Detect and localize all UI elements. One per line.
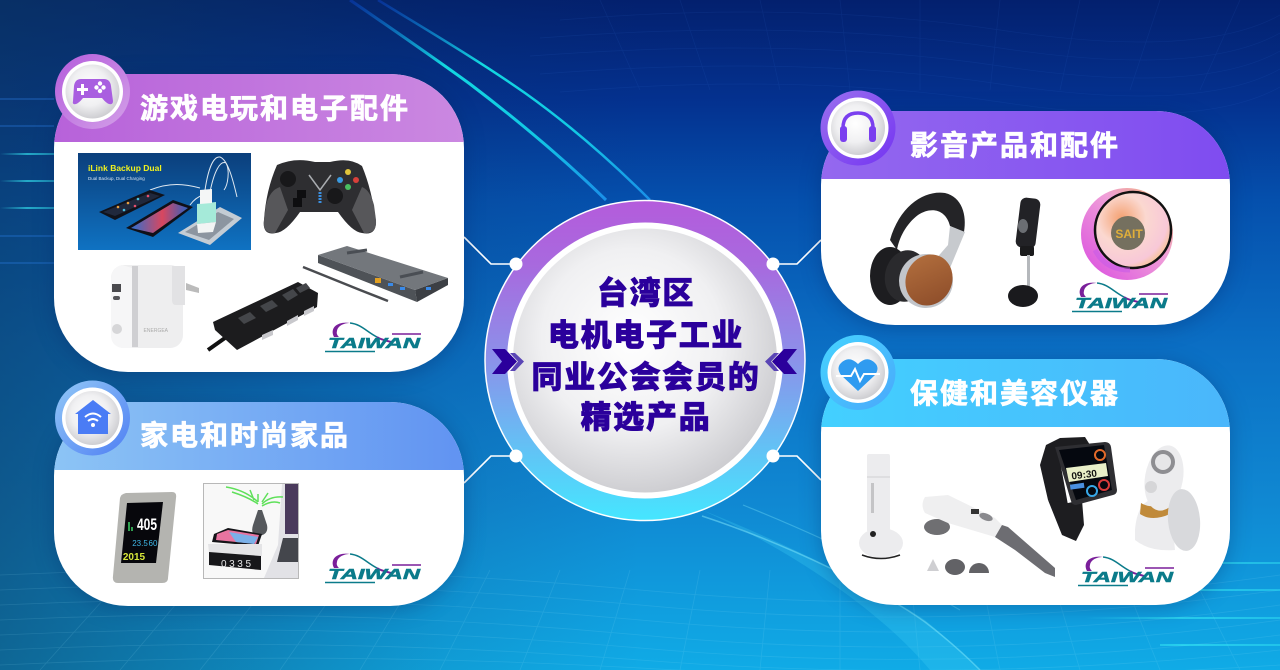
icon: smart home bbox=[55, 380, 130, 456]
product: CO2 air quality monitor bbox=[113, 492, 176, 583]
panel: health and beauty devices bbox=[820, 335, 1230, 605]
panel header bbox=[821, 111, 1230, 179]
logo: TAIWAN bbox=[1078, 557, 1175, 586]
logo: TAIWAN: TAIWAN bbox=[1081, 569, 1175, 586]
left chevrons bbox=[492, 349, 524, 374]
product: headphones bbox=[870, 193, 965, 317]
center title: 同业公会会员的 bbox=[532, 360, 760, 395]
icon: headphones bbox=[820, 90, 896, 166]
panel body bbox=[54, 74, 464, 372]
product: CO2 air quality monitor: 2015 bbox=[123, 552, 146, 563]
right chevrons bbox=[765, 349, 797, 374]
logo: TAIWAN: TAIWAN bbox=[1075, 295, 1169, 312]
logo: TAIWAN bbox=[1072, 283, 1169, 312]
product: smartwatch bbox=[1040, 437, 1117, 541]
product: iLink Backup Dual charger photo: Dual Backup, Dual Charging bbox=[88, 176, 145, 181]
product: CO2 air quality monitor: 60 bbox=[149, 539, 158, 548]
panel: games and electronic accessories bbox=[54, 54, 464, 372]
product: beauty device bbox=[1135, 442, 1203, 552]
panel header bbox=[54, 402, 464, 470]
center title bbox=[532, 276, 760, 435]
logo: TAIWAN bbox=[325, 554, 422, 583]
product: massager bbox=[922, 495, 1055, 577]
product: game controller bbox=[264, 160, 376, 234]
center title: 台湾区 bbox=[597, 276, 695, 311]
product: iLink Backup Dual charger photo: iLink Backup Dual bbox=[88, 163, 162, 173]
panel: home appliances and fashion home goods bbox=[54, 380, 464, 606]
product: white handheld device bbox=[859, 454, 903, 558]
central hub circle bbox=[485, 200, 805, 520]
panel: audio-visual products and accessories bbox=[820, 90, 1230, 325]
product: wireless charging alarm clock photo bbox=[204, 484, 298, 578]
panel body bbox=[821, 359, 1230, 605]
connector lines bbox=[464, 237, 821, 483]
center title: 精选产品 bbox=[581, 400, 711, 435]
inner white disc bbox=[507, 222, 783, 498]
panel header bbox=[821, 359, 1230, 427]
panel body bbox=[54, 402, 464, 606]
product: iLink Backup Dual charger photo bbox=[78, 153, 251, 250]
panel body bbox=[821, 111, 1230, 325]
panel header bbox=[54, 74, 464, 142]
product: USB hub bbox=[208, 282, 318, 350]
product: white wall charger bbox=[111, 265, 199, 348]
product: RGB cooling fan bbox=[1081, 188, 1173, 280]
icon: gamepad bbox=[55, 54, 130, 129]
product: docking station bbox=[303, 246, 448, 302]
heading: 家电和时尚家品 bbox=[140, 420, 350, 451]
product: white wall charger: ENERGEA bbox=[144, 328, 169, 334]
product: wireless charging alarm clock photo: 0335 bbox=[221, 559, 251, 570]
gradient ring bbox=[485, 200, 805, 520]
pearl disc bbox=[513, 228, 777, 492]
heading: 游戏电玩和电子配件 bbox=[140, 93, 410, 124]
product: RGB cooling fan: SAIT bbox=[1115, 227, 1143, 241]
heading: 影音产品和配件 bbox=[910, 130, 1120, 161]
connector node dots bbox=[510, 258, 780, 462]
product: smartwatch: 09:30 bbox=[1071, 468, 1098, 482]
center title: 电机电子工业 bbox=[548, 318, 744, 353]
heading: 保健和美容仪器 bbox=[910, 378, 1120, 409]
logo: TAIWAN: TAIWAN bbox=[328, 566, 422, 583]
logo: TAIWAN: TAIWAN bbox=[328, 335, 422, 352]
light streaks bbox=[350, 0, 650, 200]
product: CO2 air quality monitor: 23.5 bbox=[132, 539, 148, 548]
logo: TAIWAN bbox=[325, 323, 422, 352]
product: microphone bbox=[1008, 197, 1041, 307]
product: CO2 air quality monitor: 405 bbox=[137, 515, 157, 534]
icon: heart pulse bbox=[820, 335, 896, 410]
